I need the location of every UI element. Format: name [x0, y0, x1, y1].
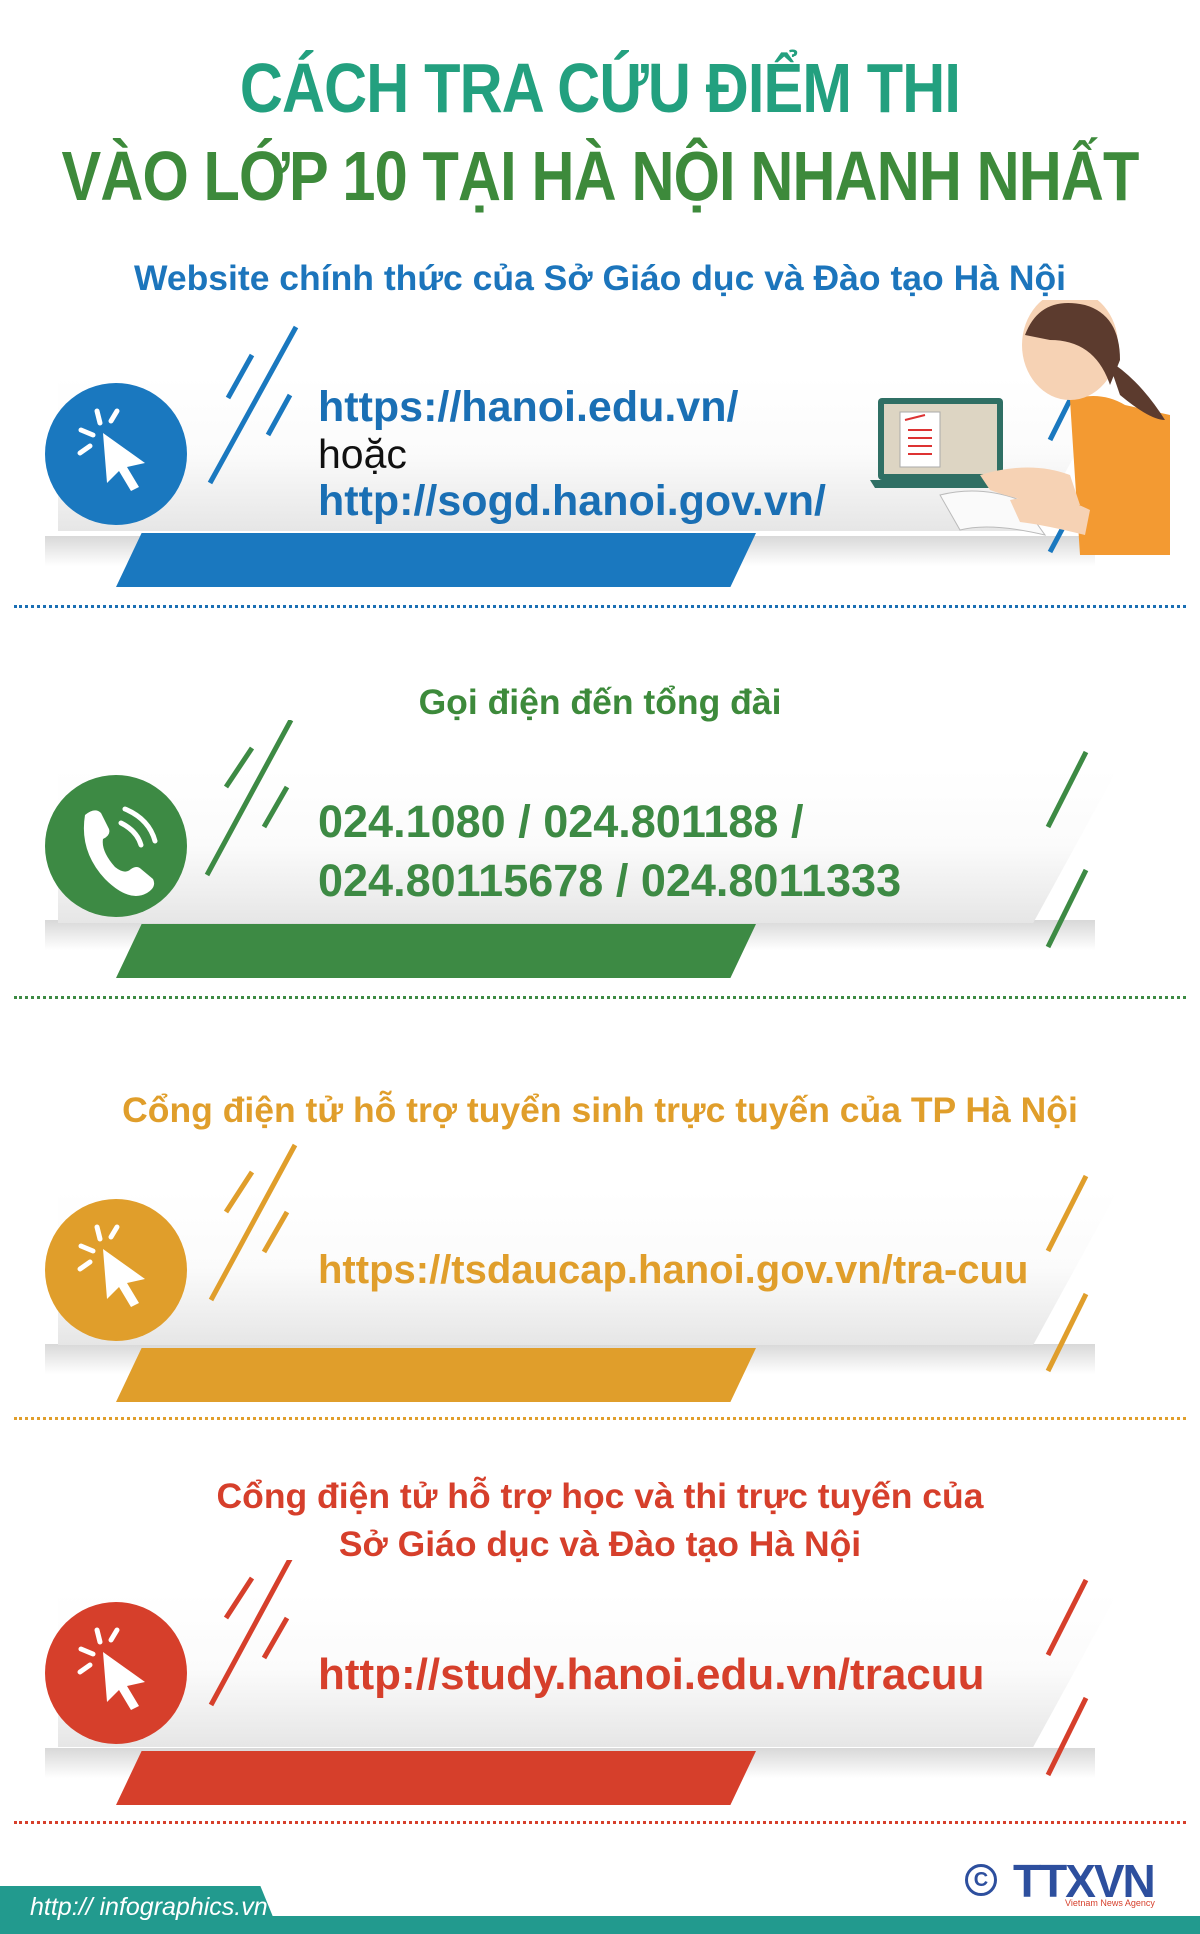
bar: [116, 924, 756, 978]
panel: phone: [45, 720, 1095, 978]
title: [61, 49, 1139, 215]
footer: [0, 1886, 1200, 1934]
heading: study: Sở Giáo dục và Đào tạo Hà Nội: [339, 1524, 861, 1564]
text: urls: [318, 383, 826, 525]
panel: study: [45, 1560, 1095, 1805]
heading: phone: Gọi điện đến tổng đài: [419, 682, 781, 722]
bar: [116, 533, 756, 587]
icon: cursor: [45, 1199, 187, 1341]
slashes: [208, 326, 1070, 554]
slashes: [208, 1560, 1088, 1776]
slashes: [208, 1144, 1088, 1372]
icon: cursor: [45, 383, 187, 525]
slashes: [204, 720, 1088, 948]
text: urls: http://sogd.hanoi.gov.vn/: [318, 477, 826, 525]
heading: study: Cổng điện tử hỗ trợ học và thi trực tuyến của: [216, 1476, 983, 1516]
logo: TTXVN: TTXVN: [1013, 1855, 1154, 1907]
text: phone numbers: 024.1080 / 024.801188 /: [318, 796, 803, 847]
text: urls: https://hanoi.edu.vn/: [318, 383, 738, 431]
panel: tsdaucap: [45, 1144, 1095, 1402]
icon: cursor: [45, 1602, 187, 1744]
heading: tsdaucap: Cổng điện tử hỗ trợ tuyển sinh trực tuyến của TP Hà Nội: [122, 1090, 1078, 1130]
text: url: http://study.hanoi.edu.vn/tracuu: [318, 1650, 985, 1699]
logo: TTXVN: Vietnam News Agency: [1065, 1898, 1155, 1908]
text: phone numbers: [318, 796, 901, 906]
title: CÁCH TRA CỨU ĐIỂM THI: [240, 49, 960, 127]
heading: study: [216, 1476, 984, 1564]
title: VÀO LỚP 10 TẠI HÀ NỘI NHANH NHẤT: [61, 137, 1139, 215]
text: url: https://tsdaucap.hanoi.gov.vn/tra-cuu: [318, 1248, 1028, 1292]
text: phone numbers: 024.80115678 / 024.8011333: [318, 855, 901, 906]
footer url: http:// infographics.vn: [30, 1893, 268, 1921]
text: urls: hoặc: [318, 431, 407, 477]
bar: [116, 1751, 756, 1805]
heading: website: Website chính thức của Sở Giáo dục và Đào tạo Hà Nội: [134, 258, 1066, 298]
bar: [116, 1348, 756, 1402]
logo: TTXVN: C: [974, 1869, 988, 1891]
icon: phone: [45, 775, 187, 917]
panel: website: [45, 300, 1170, 587]
illustration: girl with laptop: [870, 300, 1170, 555]
